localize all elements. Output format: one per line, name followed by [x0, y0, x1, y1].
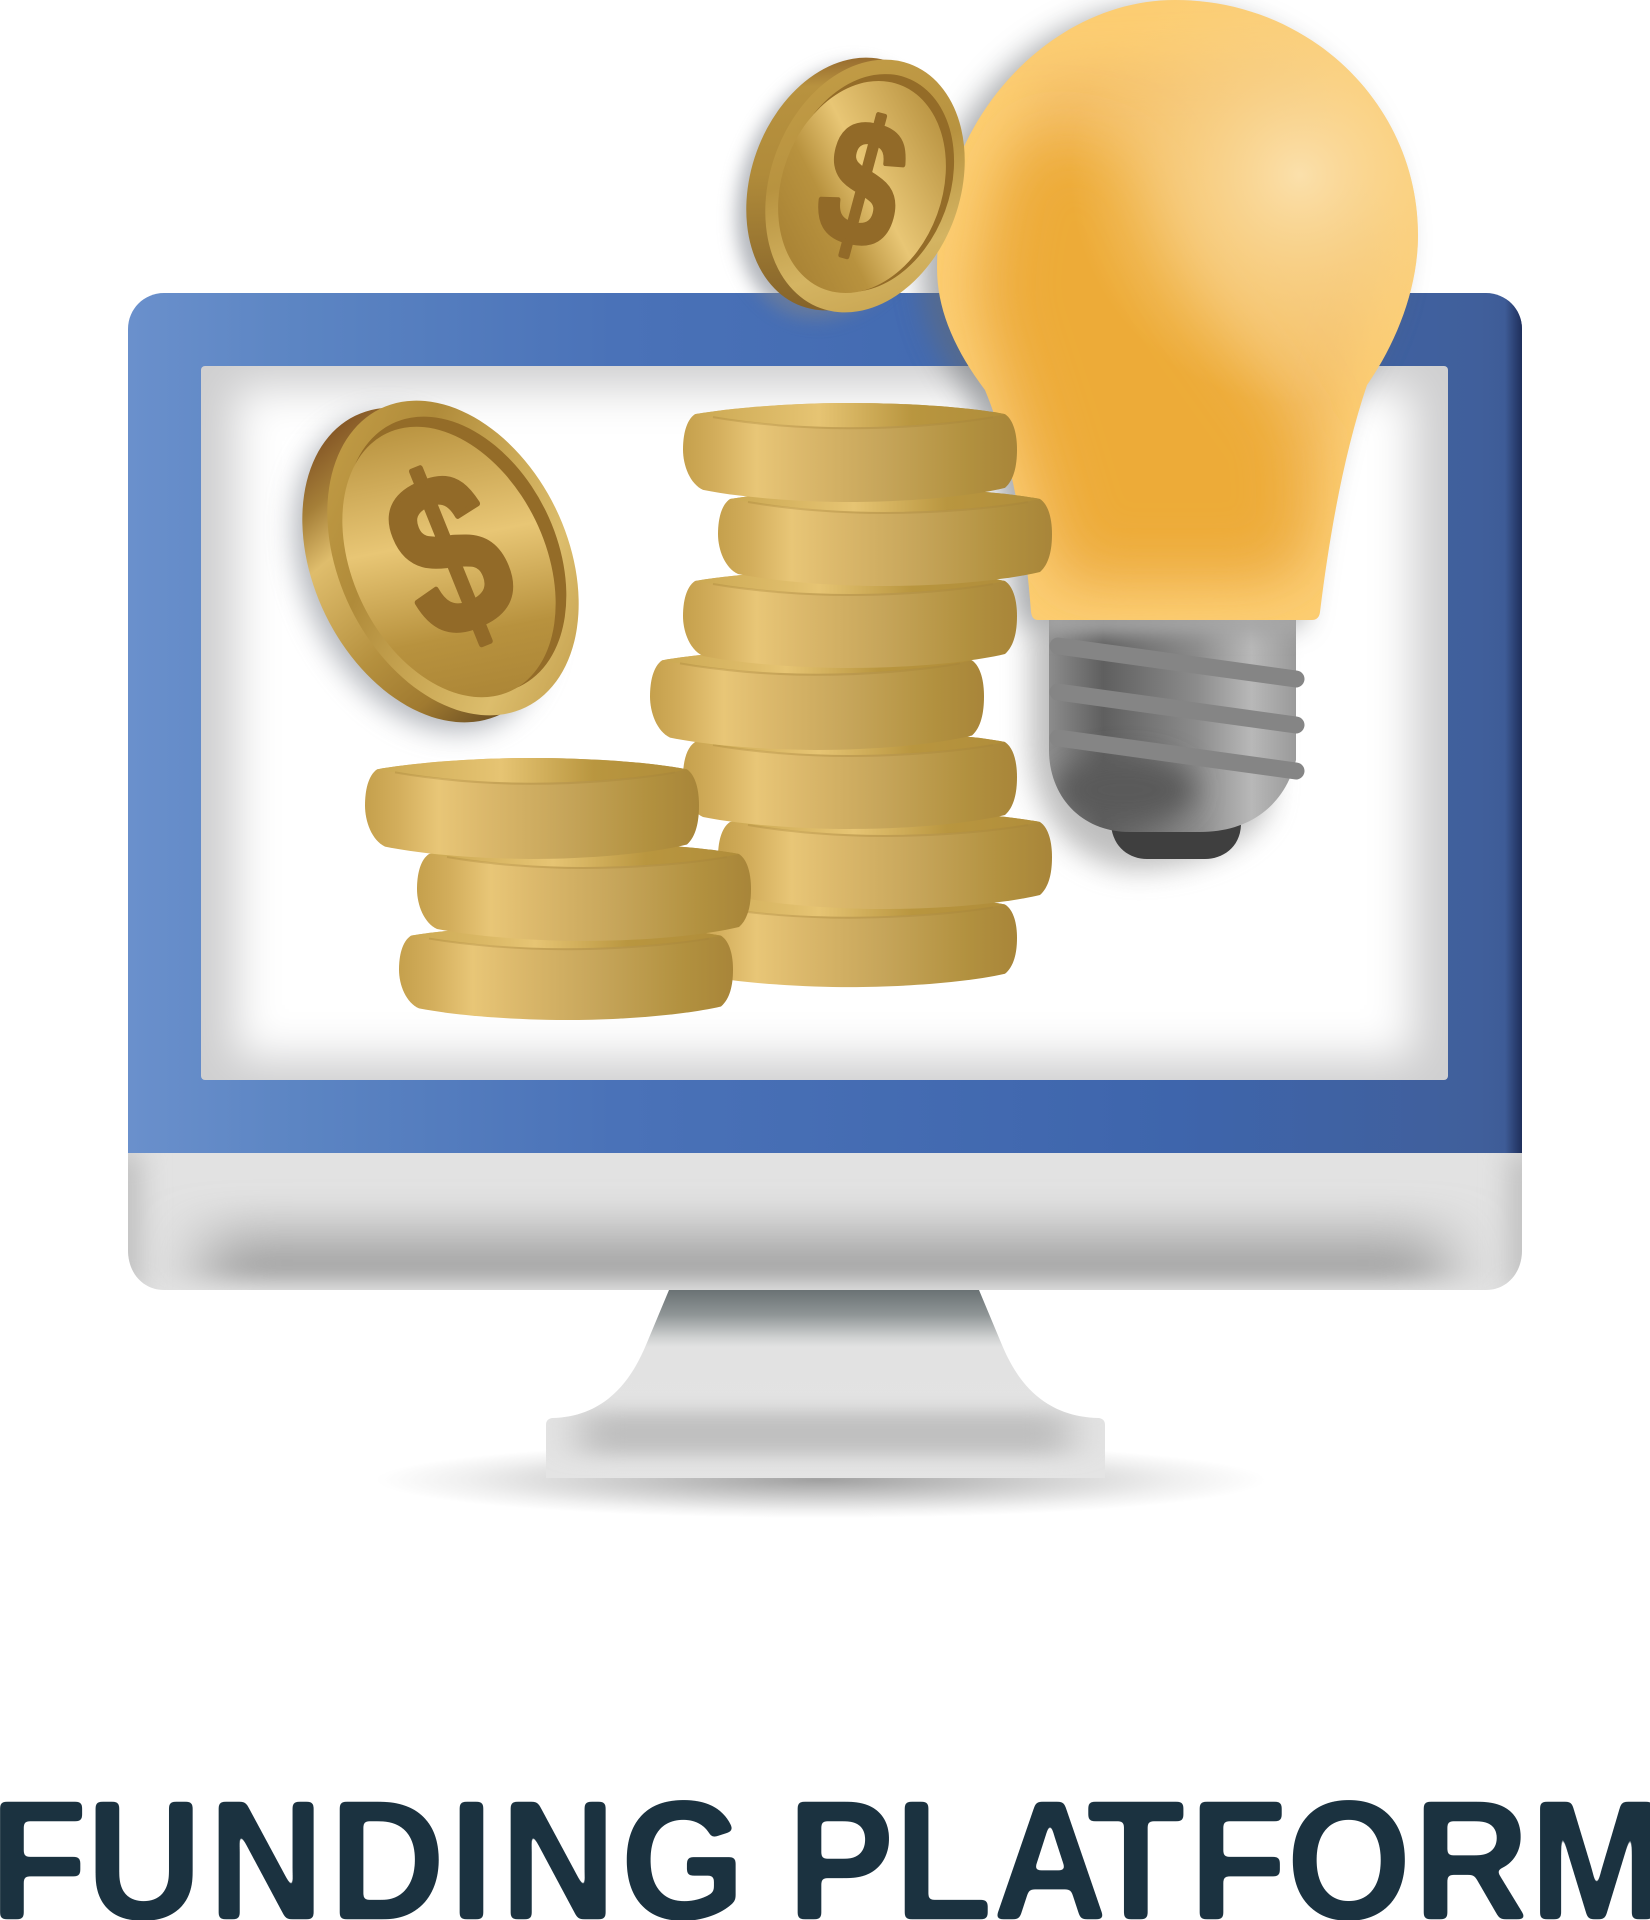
monitor blue frame — [128, 293, 1522, 1153]
monitor chin — [108, 1152, 1542, 1292]
right coin stack — [650, 403, 1052, 987]
bulb screw base — [1040, 610, 1310, 859]
light bulb — [904, 0, 1420, 884]
big dollar coin — [245, 359, 628, 773]
monitor stand — [546, 1290, 1105, 1478]
bulb shadow — [921, 6, 1402, 870]
small dollar coin — [702, 29, 999, 347]
screen — [201, 366, 1448, 1080]
floor shadow — [376, 1442, 1266, 1518]
small dollar coin: $ — [800, 78, 926, 290]
left coin stack — [365, 758, 751, 1020]
bulb glass — [937, 0, 1418, 620]
monitor — [108, 293, 1542, 1518]
big dollar coin: $ — [355, 417, 544, 691]
